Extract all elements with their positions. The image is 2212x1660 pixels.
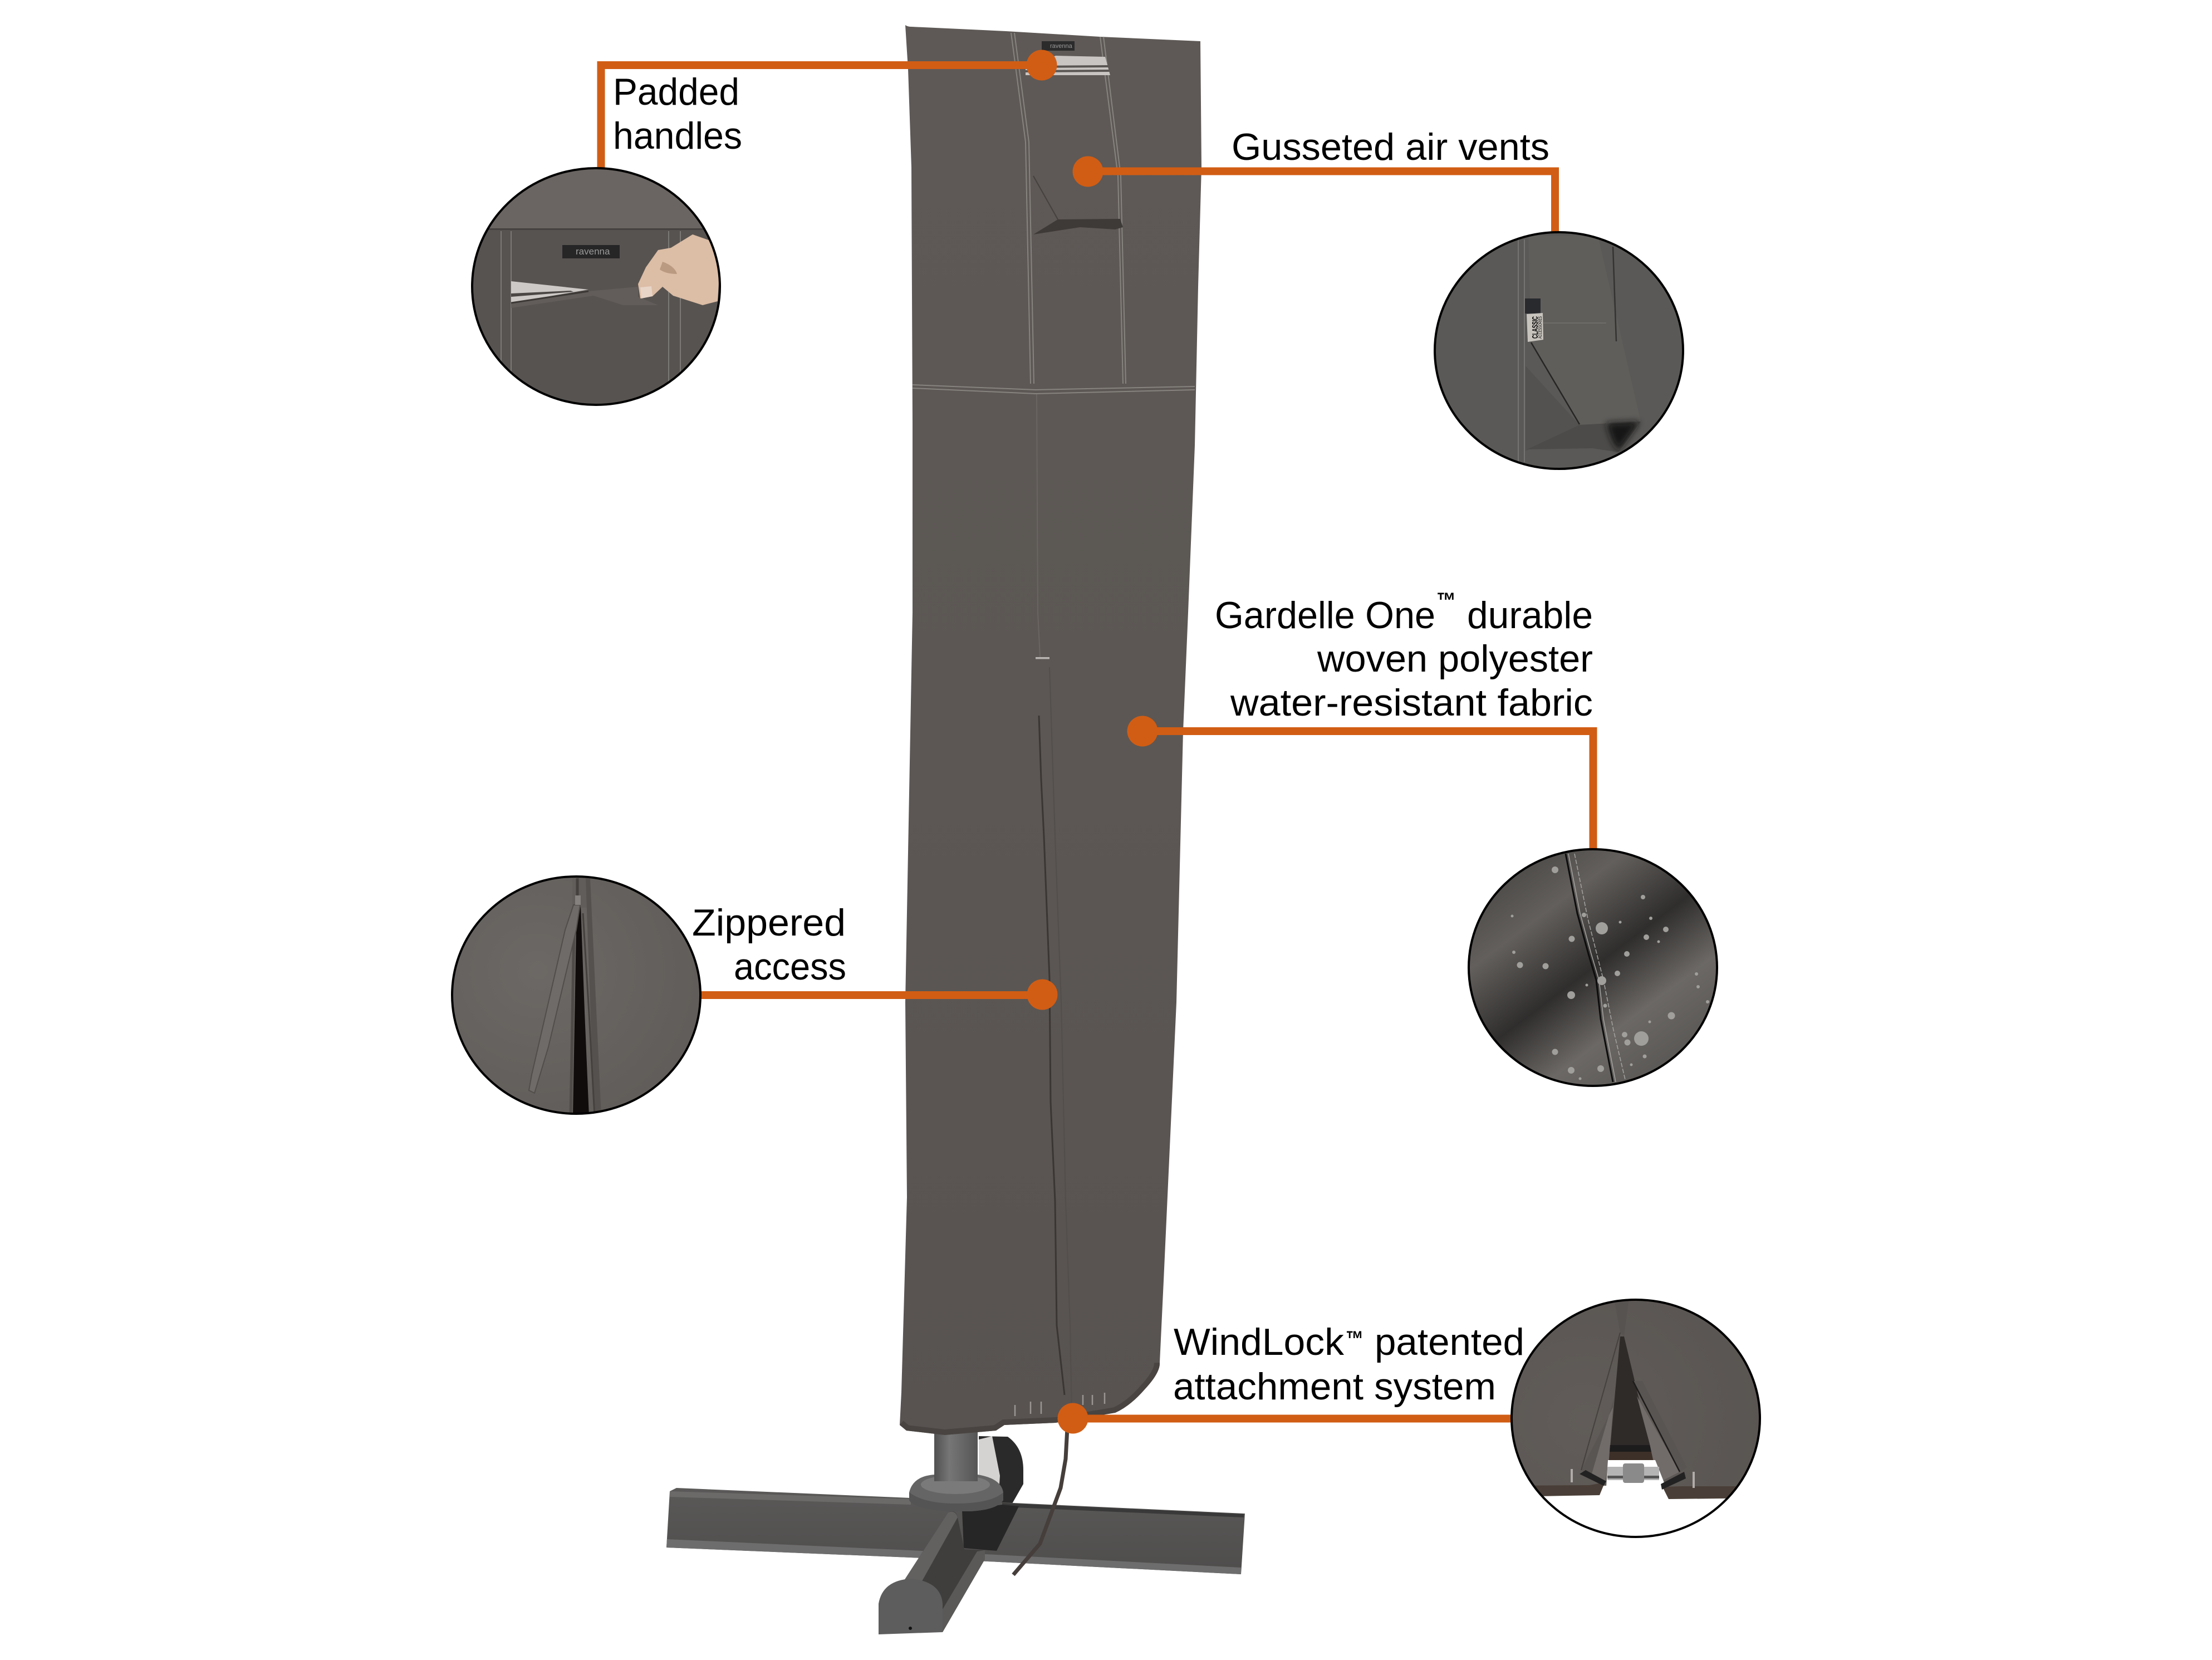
- callout line: zippered access: [700, 991, 1043, 999]
- text: Gardelle One fabric: Gardelle One: [1215, 594, 1435, 636]
- dot: air vents: [1072, 156, 1103, 187]
- text: Gardelle One fabric: durable: [1467, 594, 1593, 636]
- text: Gardelle One fabric: [1215, 589, 1593, 724]
- callout line: padded handles: [601, 65, 1042, 168]
- dot: fabric: [1127, 716, 1158, 746]
- text: Zippered access: [692, 902, 846, 988]
- base stand: [666, 1431, 1245, 1634]
- hem: [1534, 1483, 1605, 1496]
- inner flaps: [1592, 1408, 1613, 1481]
- detail circle: padded handles: [468, 164, 724, 409]
- hem: [900, 1363, 1160, 1435]
- interior: [1610, 1336, 1650, 1445]
- rear bracket: [979, 1436, 1023, 1504]
- white opening: [1606, 1460, 1666, 1487]
- white below: [1543, 1486, 1726, 1536]
- stitching: [913, 33, 1195, 394]
- detail circle: zippered access: [448, 871, 704, 1119]
- white strap behind pole: [979, 1436, 1000, 1484]
- callout line: gusseted air vents: [1088, 172, 1555, 232]
- text: Padded handles: handles: [613, 115, 742, 157]
- hub: [909, 1475, 1003, 1511]
- text: Gardelle One fabric: woven polyester: [1317, 638, 1593, 680]
- text: WindLock patented attachment system: ™: [1346, 1327, 1364, 1351]
- hem stitch marks: [1015, 1393, 1105, 1416]
- text: WindLock patented attachment system: patented: [1375, 1321, 1524, 1363]
- umbrella cover: [900, 25, 1201, 1435]
- callout line: fabric: [1142, 731, 1593, 849]
- front leg: [904, 1511, 985, 1632]
- air vent gap: [1033, 219, 1123, 234]
- zipper line: [1039, 716, 1065, 1395]
- text: WindLock patented attachment system: [1173, 1321, 1524, 1408]
- zipper pull strap: [529, 905, 580, 1093]
- callout line: WindLock: [1073, 1414, 1512, 1422]
- dot: zipper: [1027, 979, 1058, 1010]
- text: WindLock patented attachment system: attachment system: [1173, 1365, 1496, 1408]
- cover body: [900, 25, 1201, 1435]
- cross bar: [666, 1488, 1245, 1574]
- buckle and strap: [1607, 1467, 1659, 1480]
- dark centre: [962, 1505, 1019, 1551]
- text: Padded handles: [613, 71, 742, 157]
- text: WindLock patented attachment system: WindLock: [1174, 1321, 1345, 1363]
- detail circle: fabric with water droplets: [1464, 846, 1720, 1091]
- detail circle: gusseted air vents: ACCESSORIES: [1538, 316, 1543, 339]
- text: Gardelle One fabric: ™: [1436, 589, 1456, 613]
- end cap: [879, 1579, 943, 1634]
- water droplets: [1511, 866, 1709, 1080]
- infographic: umbrella cover features: [451, 25, 1761, 1634]
- padded handle strip: [1026, 56, 1110, 75]
- ravenna label: [1042, 41, 1075, 51]
- pole: [934, 1431, 978, 1484]
- text: Gardelle One fabric: water-resistant fabric: [1230, 682, 1593, 724]
- text: Zippered access: Zippered: [692, 902, 846, 944]
- dot: WindLock: [1058, 1403, 1088, 1433]
- zipper ends: [1580, 1470, 1606, 1486]
- zipper flap bar: [1036, 657, 1049, 659]
- text: Zippered access: access: [734, 946, 846, 988]
- ravenna label: ravenna: [1050, 43, 1073, 50]
- detail circle: gusseted air vents: CLASSIC: [1531, 316, 1540, 339]
- text: Padded handles: Padded: [613, 71, 739, 113]
- hand: [638, 234, 721, 305]
- detail circle: gusseted air vents: [1431, 228, 1687, 473]
- detail circle: WindLock attachment: [1503, 1297, 1770, 1543]
- strap hanging from hem: [1013, 1428, 1067, 1575]
- dot: padded handles: [1027, 50, 1057, 80]
- text: Gusseted air vents: Gusseted air vents: [1232, 126, 1549, 168]
- detail circle: padded handles: ravenna: [576, 246, 610, 257]
